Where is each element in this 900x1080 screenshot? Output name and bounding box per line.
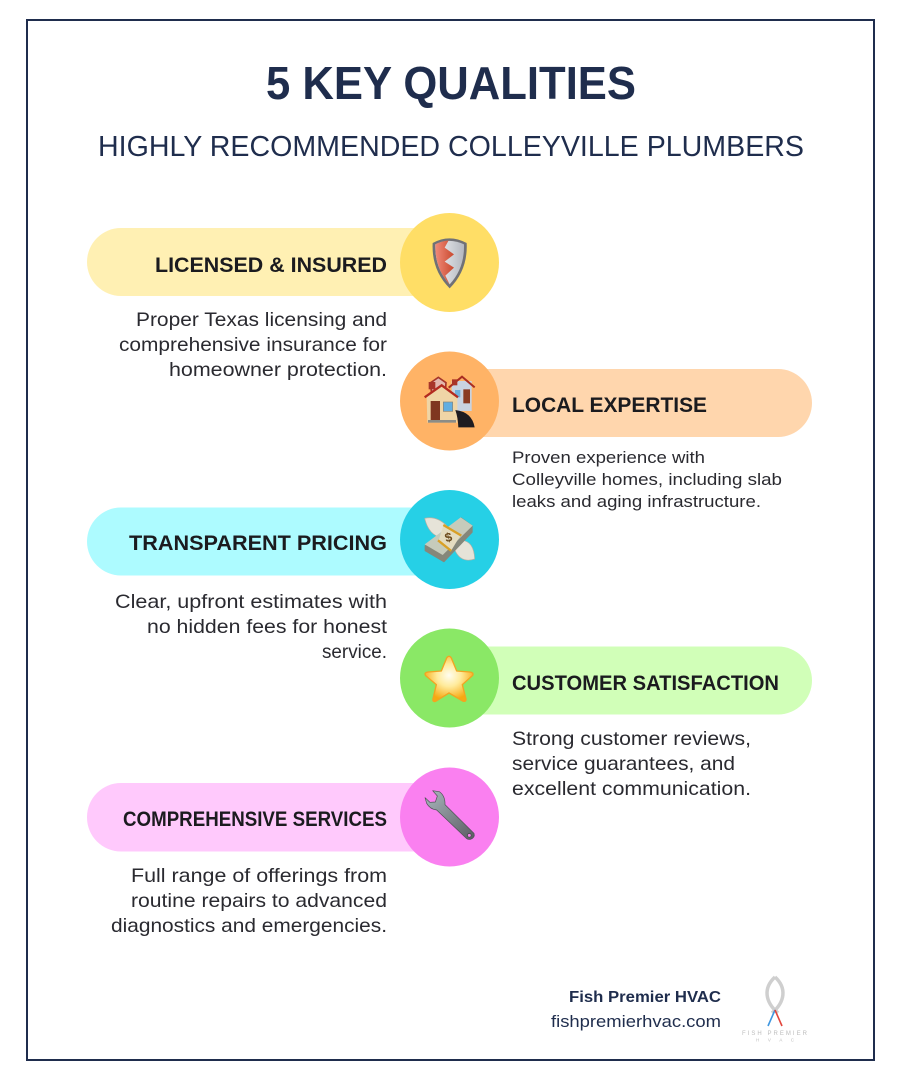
label pill: customer satisfaction xyxy=(450,646,812,714)
panel: transparent pricing xyxy=(87,490,499,663)
heading: licensed and insured: LICENSED & INSURED xyxy=(155,254,387,277)
heading: transparent pricing: TRANSPARENT PRICING xyxy=(129,532,387,555)
label pill: transparent pricing xyxy=(87,508,449,576)
icon: wrench xyxy=(425,791,474,839)
description: local expertise xyxy=(512,449,782,511)
panel: customer satisfaction xyxy=(400,628,812,800)
description: licensed and insured: Proper Texas licensing and xyxy=(136,309,387,331)
description: licensed and insured xyxy=(119,309,388,381)
footer: website: fishpremierhvac.com xyxy=(551,1012,721,1031)
label pill: licensed and insured xyxy=(87,228,449,296)
icon: houses xyxy=(425,377,475,427)
description: local expertise: Proven experience with xyxy=(512,449,705,467)
description: transparent pricing: no hidden fees for honest xyxy=(147,616,388,638)
icon circle: pink xyxy=(400,768,499,866)
panel: comprehensive services xyxy=(87,768,499,937)
heading: local expertise: LOCAL EXPERTISE xyxy=(512,394,707,417)
logo: Fish Premier HVAC xyxy=(742,977,808,1042)
logo: Fish Premier HVAC: FISH PREMIER xyxy=(742,1031,808,1037)
description: transparent pricing: Clear, upfront estimates with xyxy=(115,591,387,613)
description: comprehensive services: Full range of offerings from xyxy=(131,865,387,887)
description: transparent pricing xyxy=(115,591,388,663)
icon circle: orange xyxy=(400,352,499,450)
footer: company name: Fish Premier HVAC xyxy=(569,989,721,1006)
subtitle: HIGHLY RECOMMENDED COLLEYVILLE PLUMBERS xyxy=(98,131,804,163)
description: customer satisfaction: Strong customer reviews, xyxy=(512,728,751,750)
icon: shield xyxy=(433,238,467,288)
icon: star xyxy=(425,656,473,702)
icon circle: yellow xyxy=(400,213,499,312)
description: licensed and insured: homeowner protection. xyxy=(169,359,387,381)
description: local expertise: Colleyville homes, including slab xyxy=(512,471,782,489)
icon circle: green xyxy=(400,628,499,728)
description: comprehensive services xyxy=(111,865,387,937)
icon: flying money: $ xyxy=(443,530,454,545)
heading: comprehensive services: COMPREHENSIVE SERVICES xyxy=(123,808,387,831)
description: local expertise: leaks and aging infrastructure. xyxy=(512,493,761,511)
heading: customer satisfaction: CUSTOMER SATISFACTION xyxy=(512,672,779,695)
icon: flying money xyxy=(425,517,475,562)
panel: licensed and insured xyxy=(87,213,499,381)
label pill: local expertise xyxy=(450,369,812,437)
title: 5 KEY QUALITIES xyxy=(266,57,636,109)
description: comprehensive services: routine repairs to advanced xyxy=(131,890,387,912)
description: comprehensive services: diagnostics and emergencies. xyxy=(111,915,387,937)
icon circle: cyan xyxy=(400,490,499,589)
description: customer satisfaction xyxy=(512,728,751,800)
label pill: comprehensive services xyxy=(87,783,449,852)
description: transparent pricing: service. xyxy=(322,641,387,663)
description: customer satisfaction: service guarantees, and xyxy=(512,753,735,775)
logo: Fish Premier HVAC: H V A C xyxy=(756,1038,795,1042)
panel: local expertise xyxy=(400,352,812,511)
description: licensed and insured: comprehensive insurance for xyxy=(119,334,388,356)
description: customer satisfaction: excellent communication. xyxy=(512,778,751,800)
